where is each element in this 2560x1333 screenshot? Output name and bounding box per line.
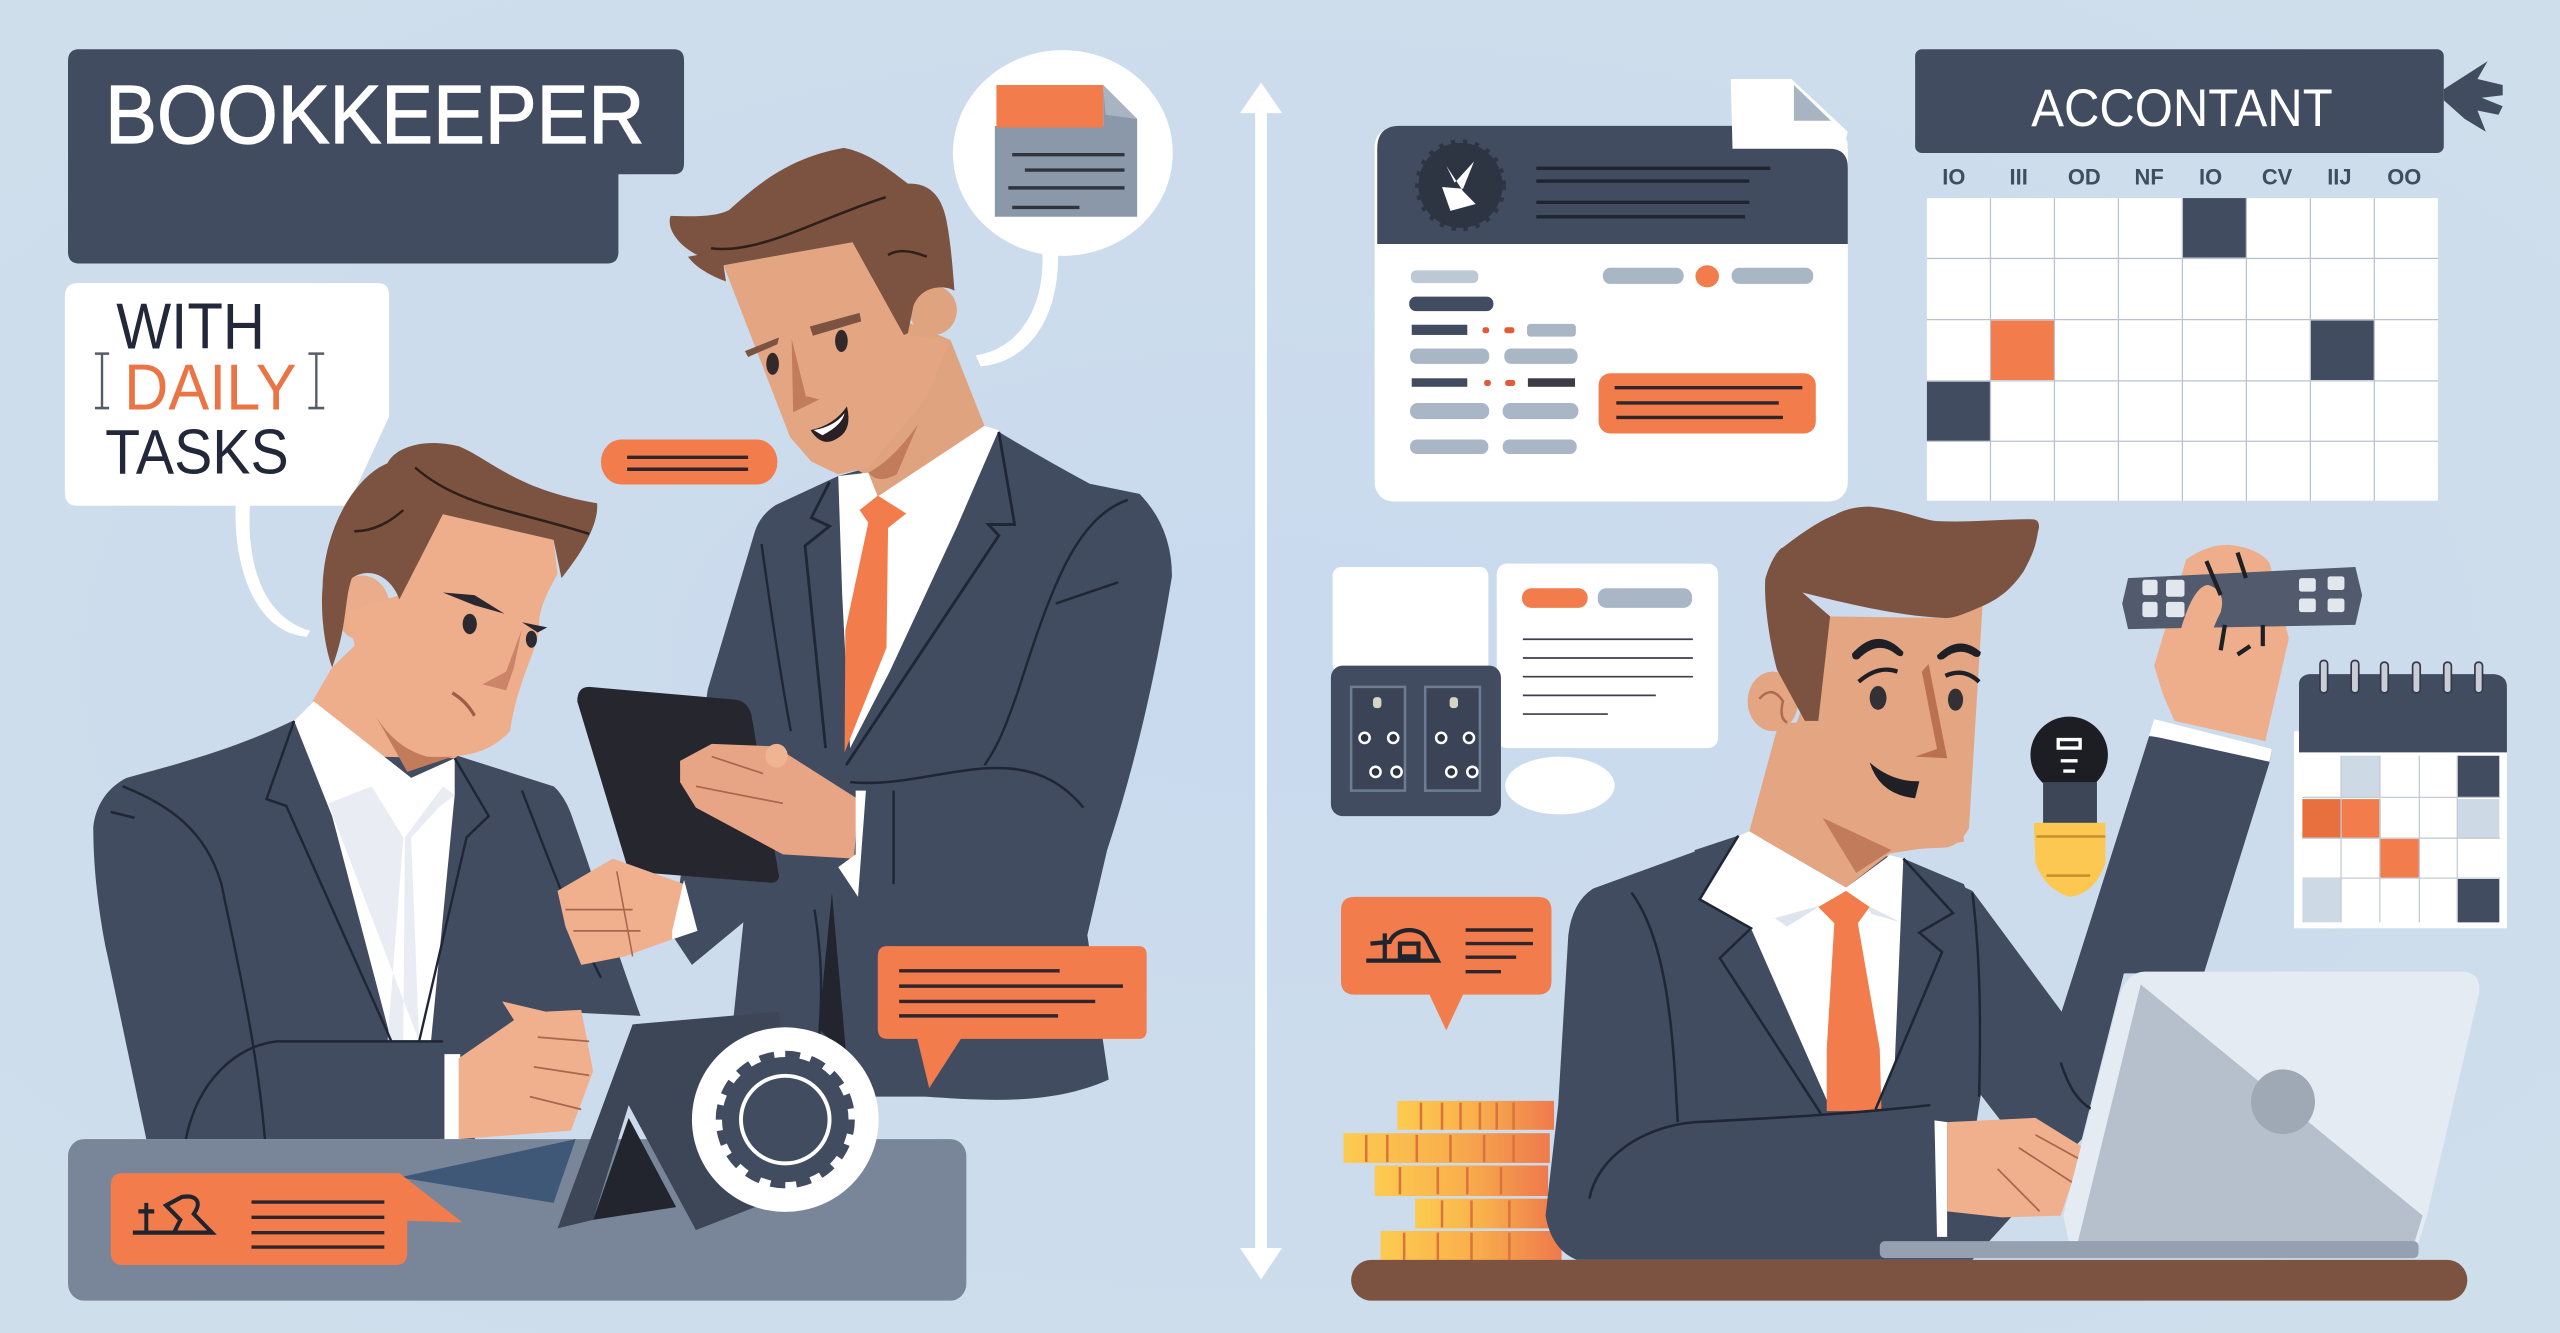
desk [1351, 1260, 2467, 1301]
white note [1333, 567, 1488, 673]
calendar weekday labels: OD [2068, 164, 2101, 189]
document with panel [1331, 564, 1718, 816]
icon: note glyph [1366, 930, 1438, 961]
seated man [93, 443, 641, 1139]
standing man: shirt [838, 426, 999, 748]
tablet held by standing man [577, 687, 779, 883]
small calendar [2294, 661, 2507, 928]
standing man: neck [822, 323, 985, 497]
speech bubble: with daily tasks [65, 283, 389, 637]
standing man: ear [909, 286, 957, 335]
coin stacks [1344, 1101, 1562, 1261]
orange button [1599, 373, 1816, 434]
calendar weekday labels: NF [2135, 164, 2164, 189]
face [1787, 606, 1982, 850]
folded note [1731, 79, 1848, 146]
standing man: suit fold lines [762, 500, 1128, 1046]
standing man [670, 148, 1172, 1100]
hair [1765, 507, 2039, 721]
calendar grid [1927, 198, 2438, 501]
right lapel [1876, 859, 1981, 1109]
calendar weekday labels: III [2010, 164, 2028, 189]
seated man: shirt [294, 701, 455, 1041]
heading: bookkeeper banner: BOOKKEEPER [105, 68, 645, 160]
tie [1818, 891, 1881, 1111]
calendar weekday labels: CV [2262, 164, 2293, 189]
icon: gear [692, 1027, 879, 1212]
standing man: brows, eyes, nose, mouth [745, 313, 861, 442]
seated man: suit fold lines [111, 786, 601, 1139]
calendar weekday labels: OO [2387, 164, 2421, 189]
speech bubble: with daily tasks: WITH [116, 292, 265, 363]
holding hand right [680, 744, 866, 897]
seated man: shirt cuff [444, 1054, 460, 1139]
seated man: brows, eyes, nose, mouth [443, 593, 547, 716]
typing hand [1947, 1118, 2083, 1217]
calendar weekday labels [1942, 164, 2421, 189]
front arm line [1589, 1063, 2092, 1199]
seated man: suit [93, 721, 641, 1139]
dashboard header [1377, 126, 1848, 244]
icon: banner ribbon [2444, 61, 2503, 132]
seated man: ear [335, 576, 390, 640]
shirt cuff [1934, 1120, 1947, 1237]
table [68, 1139, 966, 1301]
accountant man [1546, 507, 2479, 1260]
panel: accountant side [1331, 49, 2507, 1301]
white document [1497, 564, 1718, 748]
ear [1748, 672, 1798, 731]
dark switch panel [1331, 666, 1501, 816]
laptop screen [399, 1139, 576, 1203]
light bulb [2030, 717, 2108, 897]
calendar rings [2320, 661, 2482, 693]
seated man: hair [322, 443, 597, 667]
gap beside sleeve [1977, 1095, 2002, 1122]
seated man: writing hand [459, 1001, 593, 1139]
neck [1749, 723, 1964, 888]
facial features [1852, 639, 1981, 798]
left lapel [1695, 836, 1821, 1114]
heading: accountant banner [1915, 49, 2444, 153]
holding hand left [558, 859, 697, 965]
speech bubble: with daily tasks: DAILY [124, 353, 297, 424]
laptop [1880, 972, 2479, 1258]
orange note on table [111, 1173, 463, 1265]
seated man: lapels [266, 721, 489, 1041]
panel: bookkeeper side [65, 49, 1173, 1301]
heading: bookkeeper banner [68, 49, 684, 264]
lapel and fold lines [1631, 836, 1980, 1122]
dashboard card [1375, 79, 1848, 502]
speech bubble: orange note right [1341, 897, 1551, 1030]
header badge [1418, 143, 1503, 228]
clip strip [2122, 553, 2362, 659]
speech bubble: document [953, 50, 1173, 366]
standing man: suit [672, 432, 1172, 1100]
heading: accountant banner: ACCONTANT [2031, 80, 2333, 138]
calendar weekday labels: IIJ [2327, 164, 2352, 189]
arrow: vertical divider [1240, 82, 1282, 1279]
standing man: face [724, 242, 951, 474]
suit with raised arm [1546, 736, 2272, 1260]
calendar cells [2302, 756, 2500, 923]
standing man: dark trouser gap [818, 893, 846, 1054]
tablet stand [558, 1012, 799, 1230]
icon: note glyph [133, 1196, 212, 1233]
standing man: lapels [805, 432, 1015, 765]
seated man: neck [312, 629, 490, 758]
cuff [2149, 719, 2272, 762]
standing man: tie [845, 496, 906, 752]
calendar weekday labels: IO [2199, 164, 2222, 189]
table rows [1410, 268, 1813, 454]
standing man: hair [670, 148, 954, 335]
speech bubble: orange note [878, 946, 1147, 1088]
speech bubble: with daily tasks: TASKS [105, 417, 289, 487]
calendar weekday labels: IO [1942, 164, 1965, 189]
pill: small orange note [601, 440, 777, 485]
white mouse [1505, 757, 1615, 814]
seated man: face [348, 514, 558, 757]
shirt [1700, 831, 1903, 1100]
raised hand [2154, 545, 2289, 741]
